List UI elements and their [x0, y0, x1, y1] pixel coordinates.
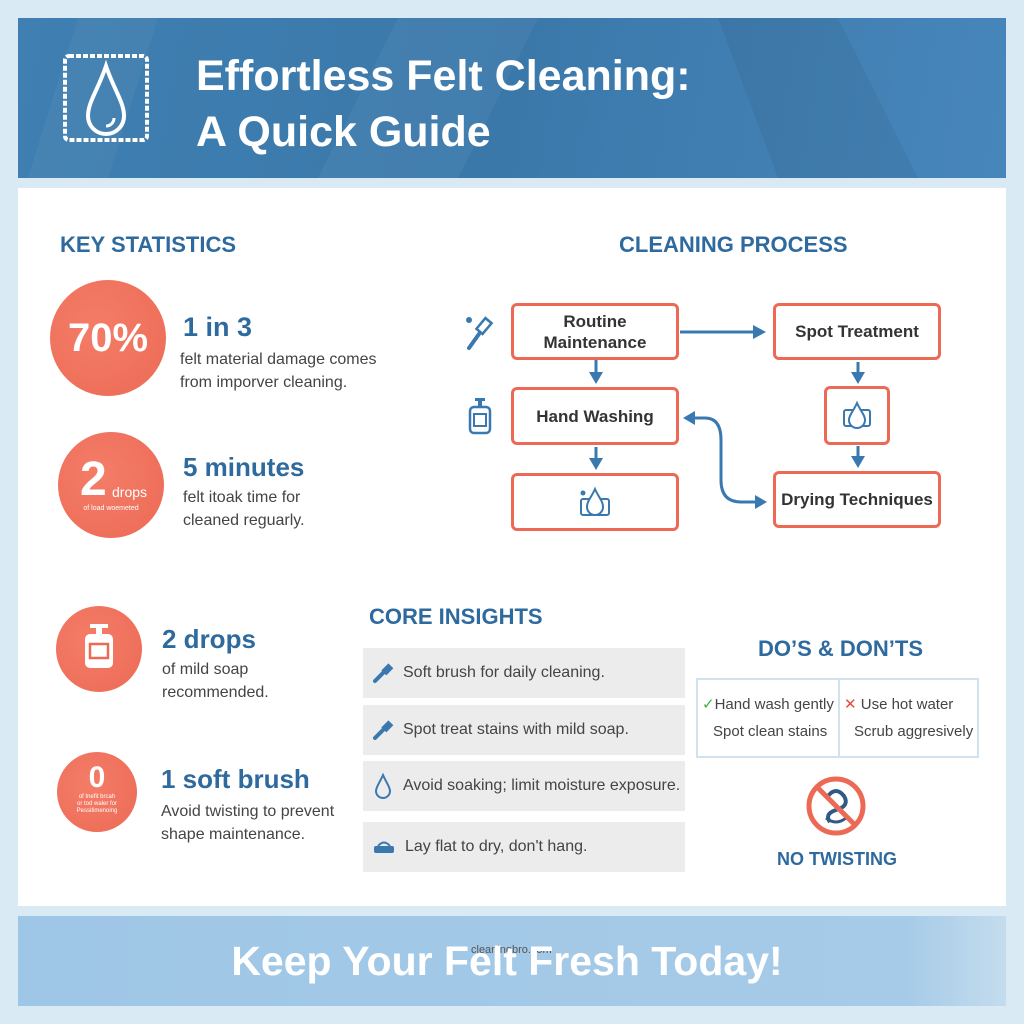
icon: water drop in felt square [63, 54, 149, 142]
insight 1: Soft brush for daily cleaning. [403, 664, 605, 681]
main panel [18, 188, 1006, 906]
stat 4: Avoid twisting to prevent [161, 803, 334, 820]
icon: no twisting [806, 776, 866, 836]
box: spot treatment: Spot Treatment [795, 322, 919, 341]
donts: ✕ Use hot water [844, 696, 953, 713]
heading: core insights: CORE INSIGHTS [369, 604, 543, 629]
header banner [18, 18, 1006, 178]
footer text: Keep Your Felt Fresh Today! [231, 938, 783, 984]
stat 2 [58, 432, 305, 538]
stat 3 [56, 606, 269, 701]
insight 4: Lay flat to dry, don't hang. [405, 838, 587, 855]
stat 2: drops [112, 484, 147, 500]
stat 4: or tod waler for [77, 801, 117, 807]
stat 1: 70% [68, 316, 148, 360]
stat 1 [50, 280, 377, 396]
insight 4 [363, 822, 685, 872]
title: A Quick Guide [196, 108, 491, 156]
footer banner [18, 916, 1006, 1006]
stat 4: Pessitimenoing [77, 808, 117, 814]
flowchart [466, 303, 941, 531]
title [196, 52, 691, 156]
stat 3: 2 drops [162, 624, 256, 654]
box: drying techniques: Drying Techniques [781, 490, 933, 509]
heading: cleaning process: CLEANING PROCESS [619, 232, 848, 257]
stat 4: shape maintenance. [161, 826, 305, 843]
label: no twisting: NO TWISTING [777, 849, 897, 869]
insights list [363, 648, 685, 872]
title: Effortless Felt Cleaning: [196, 52, 691, 100]
box: drying techniques [773, 471, 941, 528]
box: drop icon [824, 386, 890, 445]
stat 4: of tnefit brcah [79, 794, 115, 800]
stat 4 [57, 752, 334, 843]
icon: soap bottle [468, 398, 492, 434]
stat 1: 1 in 3 [183, 312, 252, 342]
stat 2: felt itoak time for [183, 489, 300, 506]
insight 2 [363, 705, 685, 755]
box: routine maintenance [511, 303, 679, 360]
insight 2: Spot treat stains with mild soap. [403, 721, 629, 738]
dos and donts table: Spot clean stains [713, 723, 827, 740]
insight 3 [363, 761, 685, 811]
stat 1: from imporver cleaning. [180, 374, 347, 391]
box: hand washing: Hand Washing [536, 406, 654, 426]
stat 2: 2 [80, 453, 107, 506]
footer banner: cleaningbro.com [471, 944, 552, 956]
box: routine maintenance: Maintenance [544, 332, 646, 352]
stat 1: felt material damage comes [180, 351, 377, 368]
insight 3: Avoid soaking; limit moisture exposure. [403, 777, 680, 794]
stat 2: cleaned reguarly. [183, 512, 305, 529]
dos and donts table [696, 678, 979, 758]
box: routine maintenance: Routine [563, 312, 627, 330]
box: spot treatment [773, 303, 941, 360]
heading: key statistics: KEY STATISTICS [60, 232, 236, 257]
stat 4: 1 soft brush [161, 764, 310, 794]
icon: brush [466, 316, 494, 350]
stat 2: of load woemeted [83, 505, 139, 512]
stat 2: 5 minutes [183, 452, 304, 482]
stat 3: recommended. [162, 684, 269, 701]
stat 4: 0 [89, 761, 105, 794]
box: washing icon [511, 473, 679, 531]
dos: ✓Hand wash gently [702, 696, 834, 713]
box: hand washing [511, 387, 679, 445]
insight 1 [363, 648, 685, 698]
dos and donts table: Scrub aggresively [854, 723, 973, 740]
heading: dos and donts: DO’S & DON’TS [758, 636, 923, 661]
stat 3: of mild soap [162, 661, 248, 678]
